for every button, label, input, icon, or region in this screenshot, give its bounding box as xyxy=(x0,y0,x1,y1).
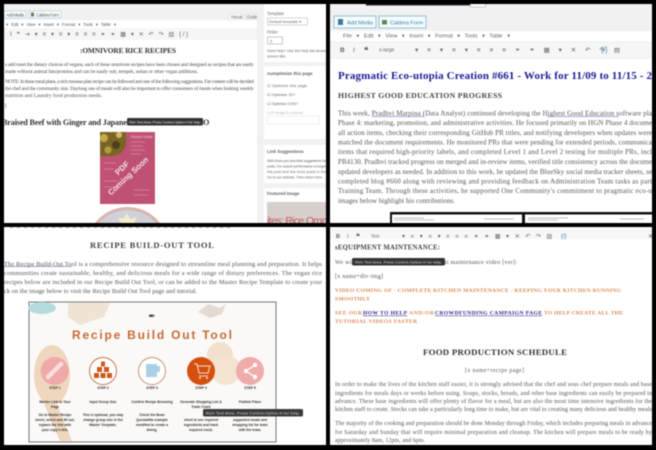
step captions: your copy's link. xyxy=(42,428,68,432)
sidebar: featured image: Featured Image xyxy=(267,191,300,196)
intro paragraph: communities create sustainable, healthy, and delicious meals for a wide range of dietary preferences. The vegan rice xyxy=(4,270,322,277)
panel: omnivore rice recipes editor: O xyxy=(203,118,209,127)
sidebar: link suggestions: We'll show you new links suggestions for xyxy=(267,159,327,163)
body paragraph: items that required high-priority labels, and completed Level 1 and Level 2 testing for multiple PRs, incl xyxy=(338,148,652,156)
body paragraphs: [ xyxy=(5,103,7,109)
sidebar: jump-to options: ☑ Optimize this page xyxy=(267,83,308,88)
step 5 icon: share xyxy=(236,357,264,385)
step captions: supported meals and xyxy=(233,418,267,422)
sidebar: link suggestions: posts. For search performance a longer xyxy=(267,164,327,168)
formatting toolbar: B xyxy=(336,234,340,240)
sidebar: jump-to options: ☑ Optimize CSS? xyxy=(267,101,299,106)
step captions: STEP 3 xyxy=(146,386,158,390)
sidebar: link suggestions: Link Suggestions xyxy=(267,149,304,154)
sidebar: link suggestions: this post and link more posts in the xyxy=(267,170,326,174)
step captions: STEP 4 xyxy=(195,386,207,390)
heading: omnivore rice recipes: :OMNIVORE RICE RECIPES xyxy=(80,46,176,55)
step captions: sheet to see required xyxy=(184,418,218,422)
step captions: sheet, select and fill out, xyxy=(35,418,75,422)
step captions: STEP 5 xyxy=(244,386,256,390)
embedded screenshot thumbnails xyxy=(390,212,652,223)
panel: omnivore rice recipes editor xyxy=(3,3,327,224)
graphic title: Recipe Build Out Tool xyxy=(72,328,232,342)
step captions: ingredients and track xyxy=(184,423,218,427)
body paragraphs: The majority of the cooking and preparation should be done Monday through Friday, which includes preparing meals in advance xyxy=(335,420,652,427)
step captions: modified to create a xyxy=(136,423,168,427)
step captions xyxy=(35,386,268,432)
orange notice: how to help: HOW TO HELP xyxy=(363,310,408,316)
intro paragraph xyxy=(4,261,323,295)
sidebar: jump-to options: ☑ Optimize JS? xyxy=(267,92,296,97)
sidebar: template settings xyxy=(264,4,326,62)
media buttons: Add Media xyxy=(347,20,374,26)
sidebar: template settings: Template xyxy=(267,11,285,16)
sidebar: jump-to options: Autoptimize this page xyxy=(267,71,313,76)
body paragraphs: In order to make the lives of the kitchen staff easier, it is strongly advised that the chef and sous chef prepare meals and base xyxy=(335,381,652,388)
formatting toolbar: {/} xyxy=(561,234,567,240)
step captions: Go to Master Recipe xyxy=(39,413,71,417)
body paragraph xyxy=(338,110,653,205)
formatting toolbar: B xyxy=(340,47,345,54)
menu bar: File ▾ Edit ▾ View ▾ Insert ▾ Format ▾ Tools ▾ Table ▾ xyxy=(343,34,510,40)
formatting toolbar: ▾ ≡ ▾ ≡ ▾ ≡ ≡ ≡ ⚭ ⚭ ▦ ▾ ✕ ↶ ↷ ▤ xyxy=(402,233,553,240)
formatting toolbar: Text xyxy=(371,234,380,238)
sidebar: link suggestions xyxy=(264,145,327,183)
step captions: shopping list for team xyxy=(232,423,268,427)
step captions: with the team. xyxy=(238,428,261,432)
body paragraphs: approximately 8am, 12pm, and 6pm. xyxy=(335,438,426,444)
formatting toolbar: {/} xyxy=(601,47,608,54)
formatting toolbar: ❝ xyxy=(364,46,369,55)
orange notice: how to help: SEE OUR xyxy=(335,310,363,316)
body paragraph: updated developers as needed. In addition to this work, he updated the BlueSky social media tracker sheets, se xyxy=(338,168,652,176)
sidebar: jump-to options: LCP image to preload xyxy=(267,110,303,115)
step captions: Master Template. xyxy=(89,423,117,427)
step 4 icon: shopping cart xyxy=(187,357,215,385)
panel: pragmatic eco-utopia editor xyxy=(330,3,653,223)
sidebar: template settings: Need help? Use the Help tab above xyxy=(267,49,326,53)
recipe pdf cover image: Recipe Detail xyxy=(131,135,153,139)
step captions: Master Link to Your xyxy=(39,400,71,404)
step captions: Generate Shopping List & xyxy=(180,400,222,404)
body paragraphs xyxy=(5,61,254,109)
orange notice: how to help: AND/OR xyxy=(409,310,435,316)
formatting toolbar: I xyxy=(347,234,349,240)
body paragraphs xyxy=(335,381,653,444)
tooltip xyxy=(127,118,203,126)
orange notice: how to help: TUTORIAL VIDEOS FASTER xyxy=(335,319,418,325)
body paragraphs: kitchen staff to create. Stocks can take a particularly long time to make, but are vital to creating many delicious and healthy meals xyxy=(335,406,653,413)
tooltip: Rich Text Area. Press Control-Option-H for help. xyxy=(206,410,300,416)
step 3 icon: measuring cup xyxy=(138,358,166,384)
editor media buttons: Caldera Form xyxy=(36,12,59,18)
media buttons xyxy=(334,16,426,28)
body paragraphs: NOTE: In these meal plans, a rich mousse plan recipe can be followed and one of the following suggestions. Fat content will be decided xyxy=(5,78,254,85)
formatting toolbar xyxy=(336,232,653,240)
step 1 icon: link xyxy=(41,357,69,385)
body paragraph: Phase 4: marketing, promotion, and administrative activities. He focused primarily on HGN Phase 4 docume xyxy=(338,119,652,127)
orange notice: video coming xyxy=(335,288,622,302)
body paragraphs: made without animal fats/proteins and can be easily sub, tempeh, seitan or other vegan additions. xyxy=(5,68,198,75)
step 2 icon: people xyxy=(90,358,116,384)
step captions: Trade Costs xyxy=(191,405,211,409)
intro paragraph: The Recipe Build-Out Tool is a comprehensive resource designed to streamline meal planning and preparation. It helps xyxy=(4,261,322,268)
panel: recipe build-out tool xyxy=(4,227,326,445)
step captions: replace the link with xyxy=(39,423,71,427)
body paragraph: all action items, checking their corresponding GitHub PR titles, and notifying developers when updates were xyxy=(338,129,652,137)
formatting toolbar: ❝ xyxy=(356,232,360,240)
sidebar: featured image xyxy=(264,188,327,224)
step captions: This is optional, you may xyxy=(83,413,123,417)
sidebar: jump-to options xyxy=(264,66,326,139)
sidebar: template settings: screen title. xyxy=(267,54,286,58)
body paragraphs: for Saturday and Sunday that will require minimal preparation and cleanup. The kitchen will prepare meals to be ready by xyxy=(335,429,652,436)
body paragraph: completed blog #660 along with reviewing and providing feedback on Administration Team tasks as part xyxy=(338,178,652,186)
tooltip: Rich Text Area. Press Control-Option-H for help. xyxy=(129,120,201,124)
body paragraph: This week, Pradhvi Marpina (Data Analyst) continued developing the Highest Good Education software pla xyxy=(338,110,653,118)
sidebar: template settings: Default template ▾ xyxy=(269,19,301,24)
orange notice: video coming: VIDEO COMING OF - COMPLETE KITCHEN MAINTENANCE - KEEPING YOUR KITCHEN RUNNING xyxy=(335,288,622,294)
recipe pdf cover image xyxy=(100,132,155,204)
logo: ✒ xyxy=(148,311,156,321)
intro paragraph: ck on the image below to visit the Recipe Build Out Tool page and tutorial. xyxy=(4,288,197,295)
body paragraph: Training Team. Through these activities, he supported One Community's commitment to pragmatic eco-u xyxy=(338,187,652,195)
step captions: change group size in the xyxy=(83,418,123,422)
body paragraph: matched the document requirements. He monitored PRs that were pending for extended periods, communica xyxy=(338,138,653,146)
shortcode line: [x name=recipe page] xyxy=(465,368,524,374)
formatting toolbar: x-large xyxy=(379,48,395,54)
step captions: Publish Plans xyxy=(239,400,261,404)
body paragraph: PR4130. Pradhvi tracked progress on merged and in-review items, verified title consistency across the docume xyxy=(338,158,652,166)
clipped toolbar remnant xyxy=(10,226,230,228)
body paragraphs: the chef and the community size. Daylong use of meals will also be important to offer consumers of meals when looking weekly xyxy=(5,85,254,92)
orange notice: how to help: CROWDFUNDING CAMPAIGN PAGE xyxy=(435,310,542,316)
heading: food production schedule: FOOD PRODUCTION SCHEDULE xyxy=(423,347,567,357)
body paragraphs: advance. These base ingredients will offer plenty of flavor for a meal, but are also the most time intensive ingredients for the xyxy=(335,398,652,405)
recipe pdf cover image: Coming Soon xyxy=(106,155,150,197)
step captions: Confirm Recipe Browsing xyxy=(131,400,173,404)
step captions: Input Group Size xyxy=(89,400,117,404)
intro paragraph: recipes below are included in our Recipe Build Out Tool, or can be added to the Master Recipe Template to create your xyxy=(4,279,323,286)
step captions: required costs. xyxy=(189,428,213,432)
step captions: dining. xyxy=(146,428,158,432)
sidebar: template settings: Order xyxy=(267,30,278,34)
media buttons: Caldera Form xyxy=(390,20,423,26)
editor media buttons: Add Media xyxy=(6,12,24,18)
body paragraphs: ingredients for meals days or weeks before using. Soups, stocks, breads, and other base ingredients can easily be prepared in xyxy=(335,390,652,397)
body paragraphs: nutrition and Laundry food production needs. xyxy=(5,92,102,99)
formatting toolbar xyxy=(340,46,620,55)
formatting toolbar: ✕ xyxy=(648,234,653,240)
panel: equipment maintenance and food production xyxy=(330,227,653,445)
equipment text lines: [x name=div-img] xyxy=(335,274,383,280)
step captions: STEP 1 xyxy=(49,386,61,390)
editor toolbar: I ❝ ⇥ ▾ ≡ ▾ ≡ ▾ ≡ ≡ ≡ ⚭ ⚭ ▦ ▾ ✕ ↶ ↷ ▤ {/} xyxy=(10,31,188,38)
step captions: STEP 2 xyxy=(97,386,109,390)
step captions: Quesadilla example xyxy=(136,418,168,422)
tooltip xyxy=(203,409,303,416)
editor media buttons xyxy=(4,11,258,20)
body paragraph: images below highlight his contributions. xyxy=(338,197,455,205)
editor menu bar: ▾ Edit ▾ View ▾ Insert ▾ Format ▾ Tools ▾ Table ▾ xyxy=(6,22,117,27)
section heading: RECIPE BUILD-OUT TOOL xyxy=(90,240,214,250)
editor media buttons: Visual xyxy=(231,14,242,20)
tooltip xyxy=(352,258,445,266)
tooltip: Rich Text Area. Press Control-Option-H for help. xyxy=(355,260,442,264)
formatting toolbar: ▾ ≡ ▾ ≡ ▾ ≡ ≡ ≡ ⚭ ⚭ ▦ ▾ ✕ ↶ ↷ ▤ xyxy=(415,47,620,54)
sidebar: featured image: ites: Rice Omni xyxy=(267,215,329,227)
formatting toolbar: I xyxy=(353,47,355,54)
recipe heading: Braised Beef with Ginger and Japane xyxy=(2,118,127,127)
recipe build out tool graphic xyxy=(28,302,276,442)
sidebar: link suggestions: Go to our website. Then return here. xyxy=(267,176,323,180)
step captions: Page xyxy=(51,405,59,409)
post title: Pragmatic Eco-utopia Creation #661 - Work for 11/09 to 11/15 - 2 xyxy=(338,70,652,82)
heading: equipment maintenance: sEQUIPMENT MAINTENANCE: xyxy=(335,244,440,252)
equipment text lines xyxy=(335,260,517,280)
recipe pdf cover image: PDF xyxy=(113,159,131,177)
orange notice: how to help: TO HELP CREATE ALL THE xyxy=(544,310,623,316)
editor media buttons: Code xyxy=(247,14,258,20)
orange notice: how to help xyxy=(335,310,623,325)
orange notice: video coming: SMOOTHLY xyxy=(335,296,370,302)
section heading: HIGHEST GOOD EDUCATION PROGRESS xyxy=(338,91,502,100)
equipment text lines: We will add a complete kitchen equipment maintenance video [ver]: xyxy=(335,260,517,266)
body paragraphs: s add meet the dietary choices of vegans, each of these omnivore recipes have been chosen and designed as recipes that are easily xyxy=(5,61,254,68)
step captions: Check the Bean xyxy=(139,413,165,417)
sidebar: template settings: 0 xyxy=(270,38,273,44)
round plate image xyxy=(95,206,160,224)
